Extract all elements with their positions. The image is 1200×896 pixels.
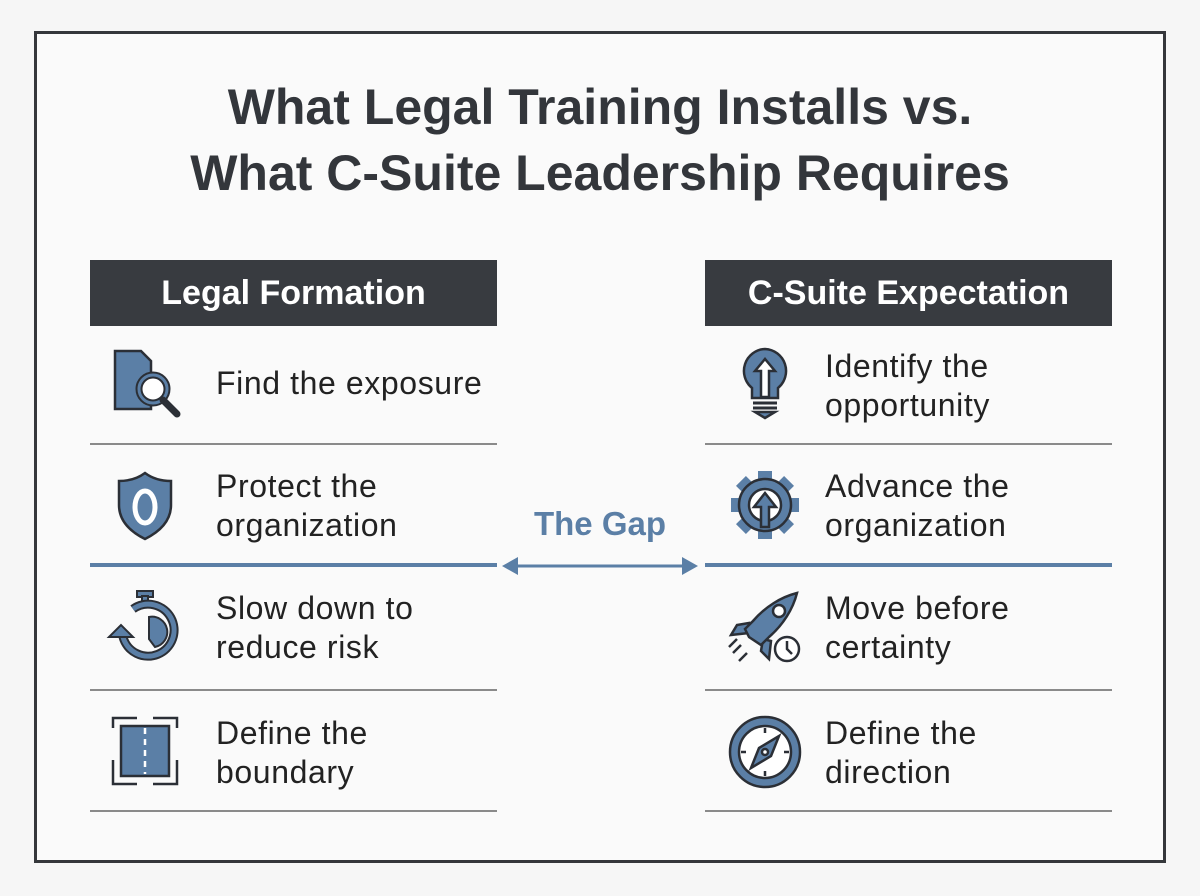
- icon: boundary: [112, 716, 178, 786]
- text: identify opportunity: [825, 348, 990, 423]
- text: define direction: direction: [825, 754, 951, 790]
- text: define boundary: boundary: [216, 754, 354, 790]
- icon: rocket: [728, 591, 800, 662]
- text: find exposure: Find the exposure: [216, 365, 482, 401]
- title: [190, 79, 1010, 201]
- header: c-suite expectation: C-Suite Expectation: [748, 274, 1069, 312]
- text: protect: organization: [216, 507, 398, 543]
- icon: shield: [118, 472, 172, 540]
- header: c-suite expectation: [705, 260, 1112, 326]
- header: legal formation: [90, 260, 497, 326]
- title: What C-Suite Leadership Requires: [190, 145, 1010, 201]
- text: advance: Advance the: [825, 468, 1010, 504]
- icon: compass: [728, 716, 802, 788]
- text: slow down: Slow down to: [216, 590, 414, 626]
- text: slow down: reduce risk: [216, 629, 379, 665]
- icon: lightbulb: [742, 348, 788, 420]
- text: define direction: Define the: [825, 715, 977, 751]
- text: define boundary: [216, 715, 368, 790]
- text: move before certainty: certainty: [825, 629, 951, 665]
- text: slow down: [216, 590, 414, 665]
- text: advance: [825, 468, 1010, 543]
- text: protect: Protect the: [216, 468, 377, 504]
- text: advance: organization: [825, 507, 1007, 543]
- label: the gap: The Gap: [534, 505, 666, 542]
- text: define boundary: Define the: [216, 715, 368, 751]
- icon: stopwatch: [106, 590, 179, 661]
- arrow: gap: [502, 557, 698, 575]
- text: identify opportunity: opportunity: [825, 387, 990, 423]
- text: identify opportunity: Identify the: [825, 348, 989, 384]
- header: legal formation: Legal Formation: [161, 274, 426, 312]
- text: define direction: [825, 715, 977, 790]
- text: protect: [216, 468, 398, 543]
- text: move before certainty: Move before: [825, 590, 1009, 626]
- icon: gear: [731, 471, 799, 539]
- text: move before certainty: [825, 590, 1009, 665]
- icon: document magnifier: [114, 350, 180, 418]
- title: What Legal Training Installs vs.: [228, 79, 972, 135]
